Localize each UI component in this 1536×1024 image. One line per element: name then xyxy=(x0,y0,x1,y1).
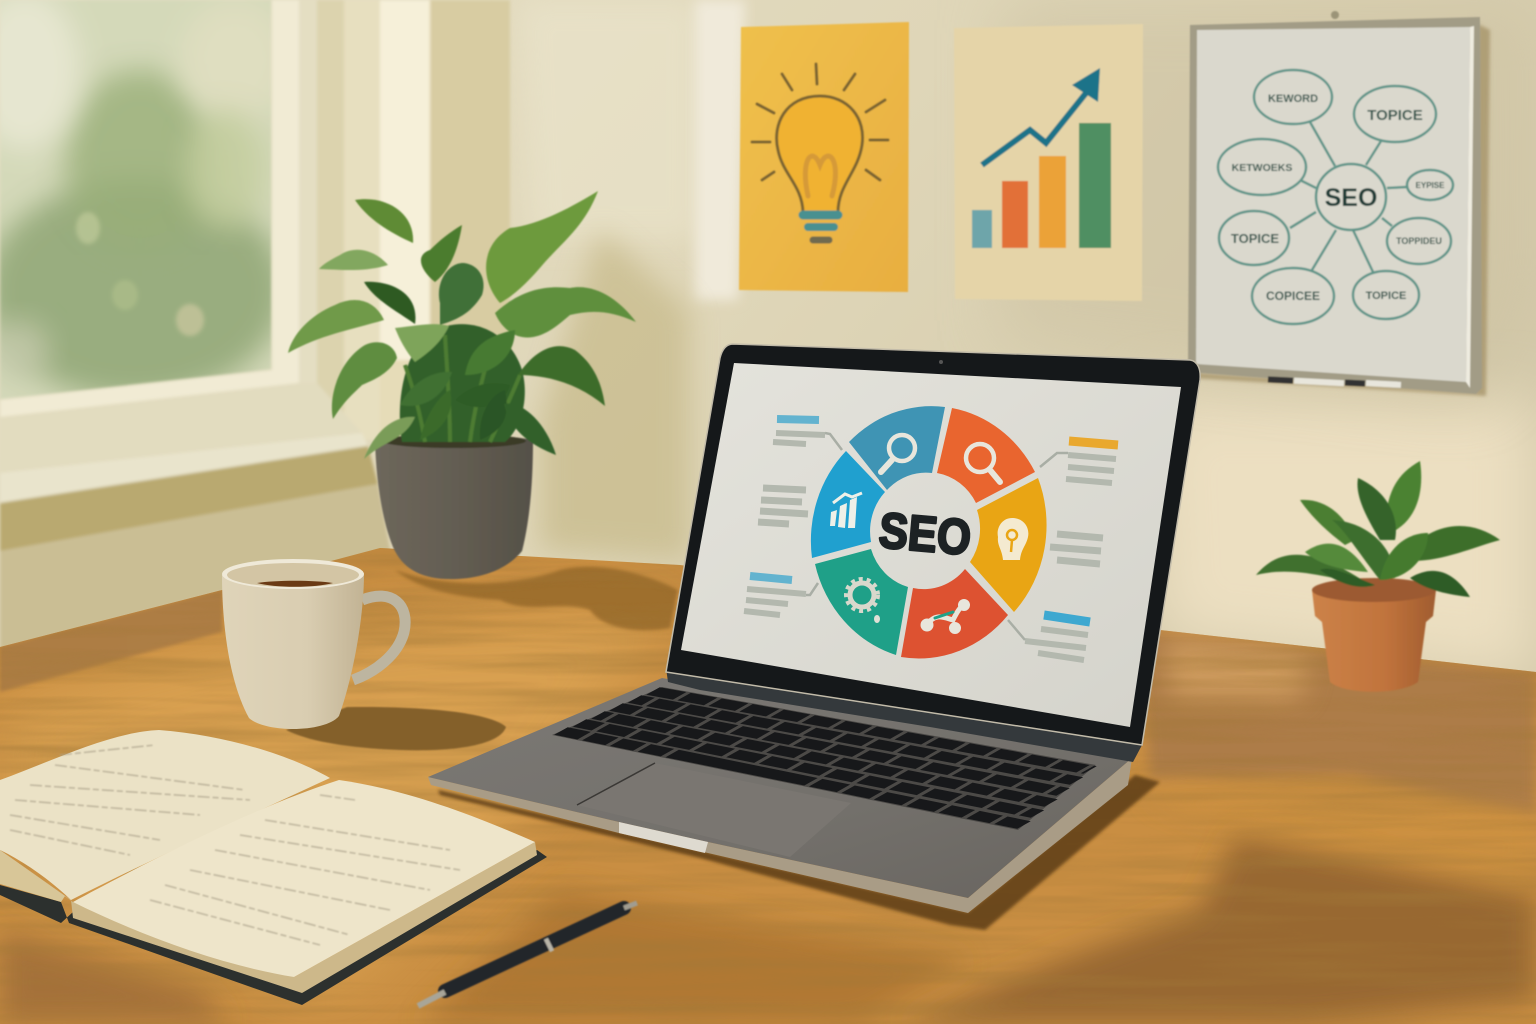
plant leaves xyxy=(288,191,636,459)
poster: light bulb xyxy=(739,22,909,292)
plant shadow on table xyxy=(395,567,678,630)
icon: gear xyxy=(846,579,880,623)
segment: red network xyxy=(901,569,1008,658)
notebook cover xyxy=(0,850,547,1005)
keyboard xyxy=(552,687,1096,830)
segment: blue chart xyxy=(811,451,885,558)
poster: growth chart xyxy=(954,24,1143,301)
dark pot rim xyxy=(382,434,526,448)
mug shadow xyxy=(286,707,506,750)
window view xyxy=(0,0,290,400)
open notebook xyxy=(0,730,547,1005)
icon: magnifier orange xyxy=(966,444,1000,482)
mug handle xyxy=(353,596,405,680)
large potted plant xyxy=(288,191,636,579)
callout: top left xyxy=(773,419,842,450)
icon: bulb xyxy=(752,64,888,240)
SEO wordmark: SEO xyxy=(877,502,973,566)
bar chart xyxy=(972,123,1111,248)
laptop screen xyxy=(681,363,1181,727)
icon: network xyxy=(923,602,968,632)
webcam xyxy=(939,360,943,364)
icon: light bulb xyxy=(998,518,1028,560)
base edge xyxy=(428,758,1132,913)
segment: teal search xyxy=(849,406,945,490)
segment: yellow bulb xyxy=(970,478,1047,612)
mug body xyxy=(222,573,364,729)
callout: middle right xyxy=(1050,534,1103,564)
whiteboard labels: KEWORD xyxy=(1268,93,1318,105)
whiteboard labels: TOPPIDEU xyxy=(1396,236,1442,246)
icon: bar chart xyxy=(830,493,862,528)
whiteboard labels: TOPICE xyxy=(1366,290,1406,302)
small plant leaves xyxy=(1256,461,1500,597)
deck xyxy=(428,678,1132,898)
whiteboard labels: TOPICE xyxy=(1367,107,1423,124)
small potted plant xyxy=(1256,461,1500,692)
segment: orange search xyxy=(937,408,1035,503)
icon: magnifier teal xyxy=(881,435,915,472)
terracotta pot xyxy=(1312,590,1436,692)
laptop lid xyxy=(666,344,1200,745)
callout: lower left xyxy=(744,576,818,615)
wall background xyxy=(0,0,1536,720)
laptop shadow xyxy=(438,775,1160,930)
right page xyxy=(73,780,535,977)
pen xyxy=(418,903,637,1006)
SEO wheel xyxy=(811,406,1047,658)
callouts on screen xyxy=(744,419,1118,660)
whiteboard labels: TOPICE xyxy=(1231,231,1279,246)
arrow xyxy=(982,68,1100,165)
notch xyxy=(619,822,708,853)
page stack xyxy=(0,842,537,993)
wooden table xyxy=(0,540,1536,1024)
left page xyxy=(0,730,330,900)
whiteboard labels: EYPISE xyxy=(1416,181,1445,190)
laptop base xyxy=(428,668,1142,913)
whiteboard labels: COPICEE xyxy=(1266,289,1320,303)
window frame and sill xyxy=(0,0,510,650)
laptop xyxy=(428,344,1200,913)
whiteboard labels: KETWOEKS xyxy=(1232,162,1292,174)
callout: top right xyxy=(1040,441,1118,483)
coffee xyxy=(257,581,333,587)
segment: green gear xyxy=(815,549,908,655)
coffee mug xyxy=(222,559,405,729)
callout: lower right xyxy=(1008,615,1090,660)
callout: middle left xyxy=(758,488,808,524)
hinge xyxy=(666,668,1142,762)
handwriting xyxy=(10,745,460,945)
whiteboard mind map xyxy=(1188,11,1490,396)
trackpad xyxy=(577,763,851,857)
whiteboard labels xyxy=(1231,93,1445,303)
plant pot xyxy=(375,435,533,579)
whiteboard labels: SEO xyxy=(1325,184,1377,212)
